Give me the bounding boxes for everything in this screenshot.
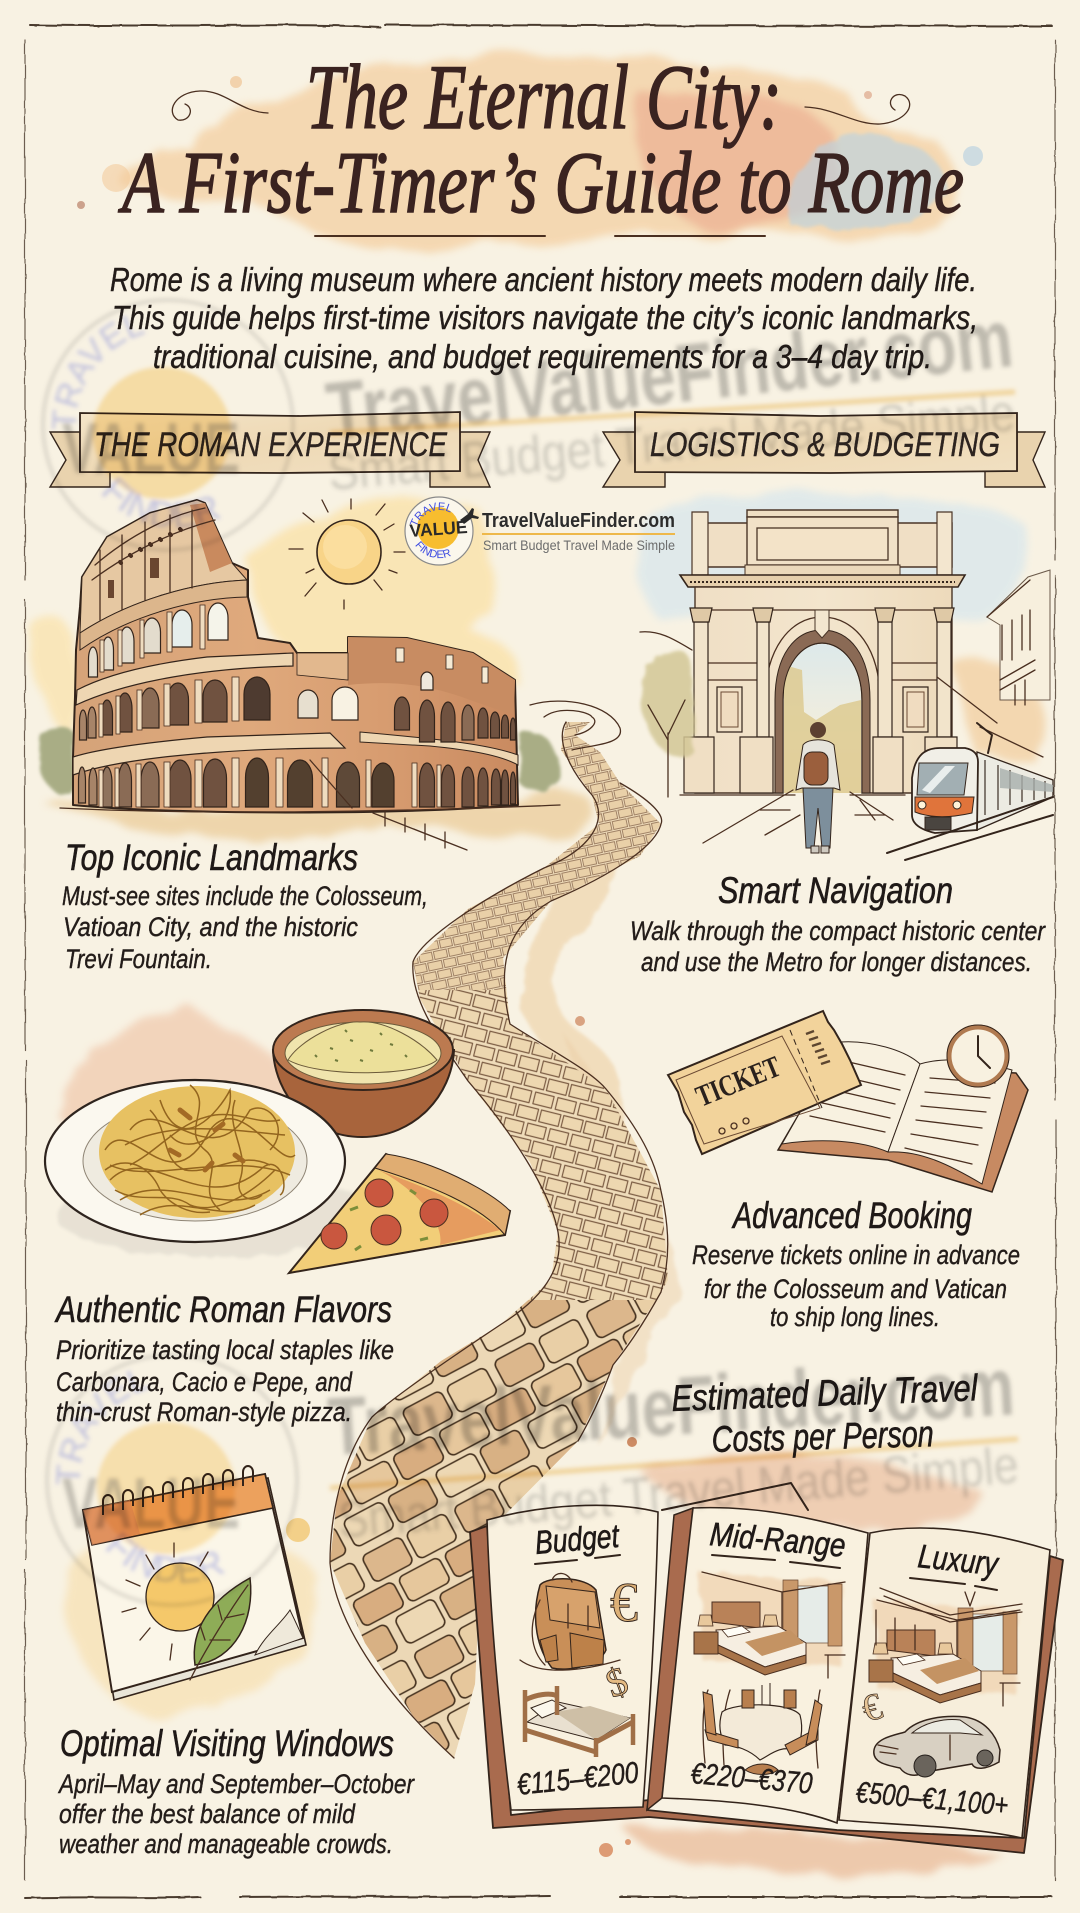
watermark: lower: VALUE bbox=[62, 1464, 240, 1544]
section: estimated daily costs: Estimated Daily Travel bbox=[671, 1367, 980, 1419]
section: advanced booking: for the Colosseum and Vatican bbox=[704, 1274, 1007, 1304]
watermark: lower: FINDER bbox=[105, 1532, 225, 1585]
section: advanced booking: to ship long lines. bbox=[770, 1302, 940, 1332]
ribbon: logistics and budgeting: LOGISTICS & BUDGETING bbox=[650, 426, 1000, 464]
section: optimal visiting windows: April–May and September–October bbox=[57, 1769, 415, 1799]
colosseum body bbox=[73, 500, 518, 812]
colosseum right wall bbox=[348, 637, 515, 715]
section: top iconic landmarks: Top Iconic Landmarks bbox=[65, 837, 358, 878]
section: optimal visiting windows bbox=[57, 1723, 415, 1859]
colosseum ground and fence bbox=[60, 760, 560, 850]
left tree bbox=[642, 649, 693, 754]
colosseum pale arches bbox=[88, 603, 433, 720]
luxury ceiling mouldings bbox=[876, 1588, 1022, 1650]
ticket and book bbox=[668, 1011, 1028, 1192]
watermark: lower: TRAVEL bbox=[54, 1370, 148, 1485]
intro text: traditional cuisine, and budget requirements for a 3–4 day trip. bbox=[153, 338, 932, 375]
intro text bbox=[110, 261, 978, 375]
budget book bbox=[470, 1483, 1063, 1853]
food illustration bbox=[45, 1010, 510, 1273]
watermark: lower bbox=[44, 1341, 1021, 1608]
ribbon: logistics and budgeting bbox=[603, 412, 1045, 487]
logo: TRAVEL bbox=[410, 502, 451, 525]
arch columns bbox=[684, 608, 957, 793]
page: budget: Budget bbox=[533, 1517, 622, 1561]
right building bbox=[987, 570, 1050, 700]
pizza slice bbox=[289, 1154, 510, 1273]
page: luxury bbox=[854, 1537, 1022, 1822]
ribbon: the roman experience: THE ROMAN EXPERIENCE bbox=[94, 426, 447, 464]
section: smart navigation: Smart Navigation bbox=[718, 870, 953, 911]
pasta plate bbox=[45, 1080, 345, 1242]
icon: euro: € bbox=[610, 1572, 638, 1634]
colosseum attic details bbox=[92, 508, 215, 620]
logo: VALUE bbox=[409, 517, 468, 541]
book cover bbox=[470, 1526, 1063, 1853]
page: mid-range: Mid-Range bbox=[708, 1515, 847, 1564]
luxury page sheet bbox=[839, 1528, 1050, 1838]
page: luxury: Luxury bbox=[916, 1537, 1002, 1583]
overhead wires bbox=[937, 677, 1043, 757]
colosseum bbox=[40, 500, 560, 850]
clock bbox=[947, 1025, 1009, 1087]
calendar sun bbox=[146, 1563, 214, 1631]
section: optimal visiting windows: weather and manageable crowds. bbox=[59, 1829, 393, 1859]
bowl bbox=[273, 1010, 454, 1137]
arch of triumph bbox=[640, 510, 1053, 860]
road bbox=[329, 700, 668, 1759]
calendar leaf bbox=[194, 1578, 251, 1665]
section: authentic roman flavors: Authentic Roman Flavors bbox=[54, 1289, 392, 1330]
sun bbox=[289, 499, 405, 609]
section: authentic roman flavors: Prioritize tasting local staples like bbox=[56, 1335, 394, 1365]
metro train bbox=[887, 723, 1053, 860]
ticket bbox=[668, 1011, 861, 1154]
section: top iconic landmarks: Vatioan City, and the historic bbox=[63, 912, 358, 942]
icon: dining table bbox=[703, 1683, 822, 1774]
calendar bbox=[83, 1466, 306, 1700]
icon: dollar: $ bbox=[600, 1657, 634, 1706]
section: smart navigation bbox=[630, 870, 1046, 977]
page: budget bbox=[515, 1517, 640, 1802]
watermark: upper: FINDER bbox=[101, 476, 221, 530]
section: advanced booking bbox=[692, 1195, 1020, 1332]
colosseum attic tier bbox=[80, 500, 247, 633]
section: authentic roman flavors: thin-crust Roman-style pizza. bbox=[56, 1397, 352, 1427]
section: estimated daily costs bbox=[671, 1367, 980, 1460]
arch body bbox=[695, 587, 952, 793]
price: €220–€370 bbox=[689, 1757, 814, 1801]
open book bbox=[778, 1042, 1028, 1192]
logo: FINDER bbox=[415, 541, 451, 558]
price: €115–€200 bbox=[515, 1756, 640, 1802]
price: €500–€1,100+ bbox=[854, 1776, 1010, 1822]
logo: Smart Budget Travel Made Simple bbox=[483, 538, 675, 553]
title bbox=[118, 46, 964, 232]
section: top iconic landmarks: Must-see sites include the Colosseum, bbox=[62, 881, 428, 911]
icon: bed bbox=[525, 1686, 633, 1757]
icon: car bbox=[874, 1716, 1000, 1777]
icon: luxury bedroom bbox=[869, 1600, 1020, 1706]
section: optimal visiting windows: Optimal Visiting Windows bbox=[60, 1723, 394, 1764]
page: mid-range bbox=[689, 1515, 847, 1801]
arch ground lines bbox=[680, 790, 905, 843]
traveller bbox=[796, 722, 840, 853]
colosseum bands bbox=[76, 653, 293, 705]
section: authentic roman flavors: Carbonara, Cacio e Pepe, and bbox=[56, 1367, 353, 1397]
arch attic bbox=[695, 523, 952, 567]
colosseum dark arches bbox=[78, 677, 516, 807]
colosseum trees bbox=[40, 727, 558, 794]
watermark: upper: VALUE bbox=[62, 409, 240, 489]
section: estimated daily costs: Costs per Person bbox=[711, 1413, 934, 1460]
colosseum columns bbox=[99, 605, 441, 807]
logo: TravelValueFinder.com bbox=[482, 510, 675, 532]
ribbon: the roman experience bbox=[50, 412, 490, 487]
watermark: upper bbox=[40, 293, 1017, 552]
section: top iconic landmarks: Trevi Fountain. bbox=[65, 944, 212, 974]
section: top iconic landmarks bbox=[62, 837, 428, 974]
ticket: TICKET bbox=[691, 1050, 785, 1113]
section: authentic roman flavors bbox=[54, 1289, 394, 1427]
section: optimal visiting windows: offer the best balance of mild bbox=[59, 1799, 356, 1829]
mid-range page sheet bbox=[662, 1508, 868, 1823]
table shadow bbox=[55, 1173, 375, 1257]
logo bbox=[404, 496, 675, 566]
watermark: upper: TRAVEL bbox=[50, 315, 146, 430]
title flourishes bbox=[172, 91, 910, 236]
icon: backpack bbox=[520, 1573, 620, 1670]
title: The Eternal City: bbox=[306, 46, 782, 148]
icon: euro small: € bbox=[857, 1685, 887, 1731]
budget page sheet bbox=[487, 1505, 658, 1810]
icon: bedroom bbox=[694, 1572, 845, 1678]
section: advanced booking: Advanced Booking bbox=[731, 1195, 972, 1236]
